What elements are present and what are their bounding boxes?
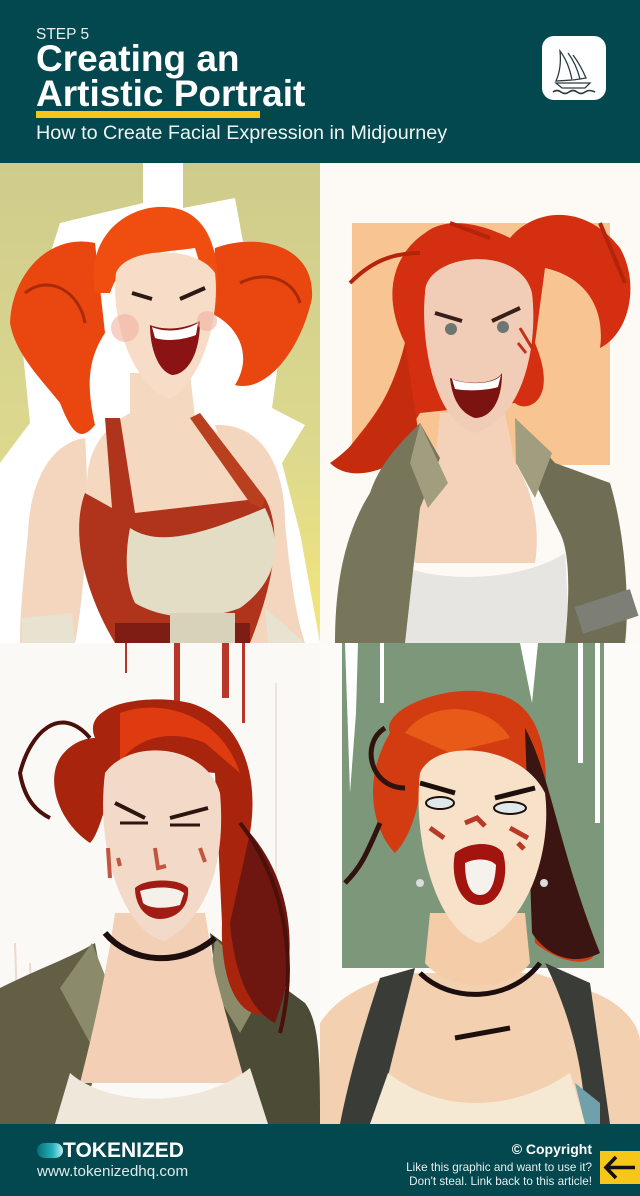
arrow button: [600, 1151, 640, 1184]
copyright text: Don't steal. Link back to this article!: [409, 1175, 592, 1188]
neck and chest: [411, 413, 537, 563]
panel: crying portrait on white background: [0, 643, 320, 1124]
jacket: [0, 943, 110, 1124]
website: www.tokenizedhq.com: [37, 1163, 188, 1180]
title: Artistic Portrait: [36, 72, 305, 114]
white shirt: [390, 553, 570, 643]
face: [419, 750, 546, 943]
title underline: [36, 111, 260, 118]
copyright text: [406, 1161, 592, 1188]
back and shoulders: [320, 973, 640, 1124]
title: Creating an: [36, 38, 240, 79]
hair: [340, 215, 630, 466]
jacket: [335, 423, 440, 643]
panel: laughing portrait on yellow background: [0, 163, 320, 643]
logo wordmark: TOKENIZED: [63, 1139, 184, 1162]
neck and chest: [80, 913, 245, 1083]
panel: crying portrait on green background: [320, 643, 640, 1124]
white top: [55, 1068, 268, 1124]
step label: STEP 5: [36, 26, 89, 43]
footer band: [0, 1124, 640, 1196]
logo: [37, 1139, 184, 1162]
header band: [0, 0, 640, 163]
copyright text: Like this graphic and want to use it?: [406, 1161, 592, 1174]
face: [115, 252, 216, 399]
face: [103, 750, 221, 941]
hair: [54, 699, 285, 1015]
straps: [340, 963, 610, 1124]
subtitle: How to Create Facial Expression in Midjourney: [36, 122, 447, 144]
title: [36, 38, 305, 114]
arms and shoulders: [20, 438, 87, 643]
icon: Midjourney boat: [542, 36, 606, 100]
face: [424, 259, 533, 433]
hair back: [10, 241, 105, 434]
copyright heading: © Copyright: [512, 1141, 592, 1157]
neck: [425, 913, 530, 986]
top and straps: [79, 418, 274, 643]
neck and chest: [87, 373, 234, 513]
panel: laughing portrait with olive jacket: [320, 163, 640, 643]
logo mark: [37, 1143, 63, 1158]
hair: [373, 691, 595, 962]
